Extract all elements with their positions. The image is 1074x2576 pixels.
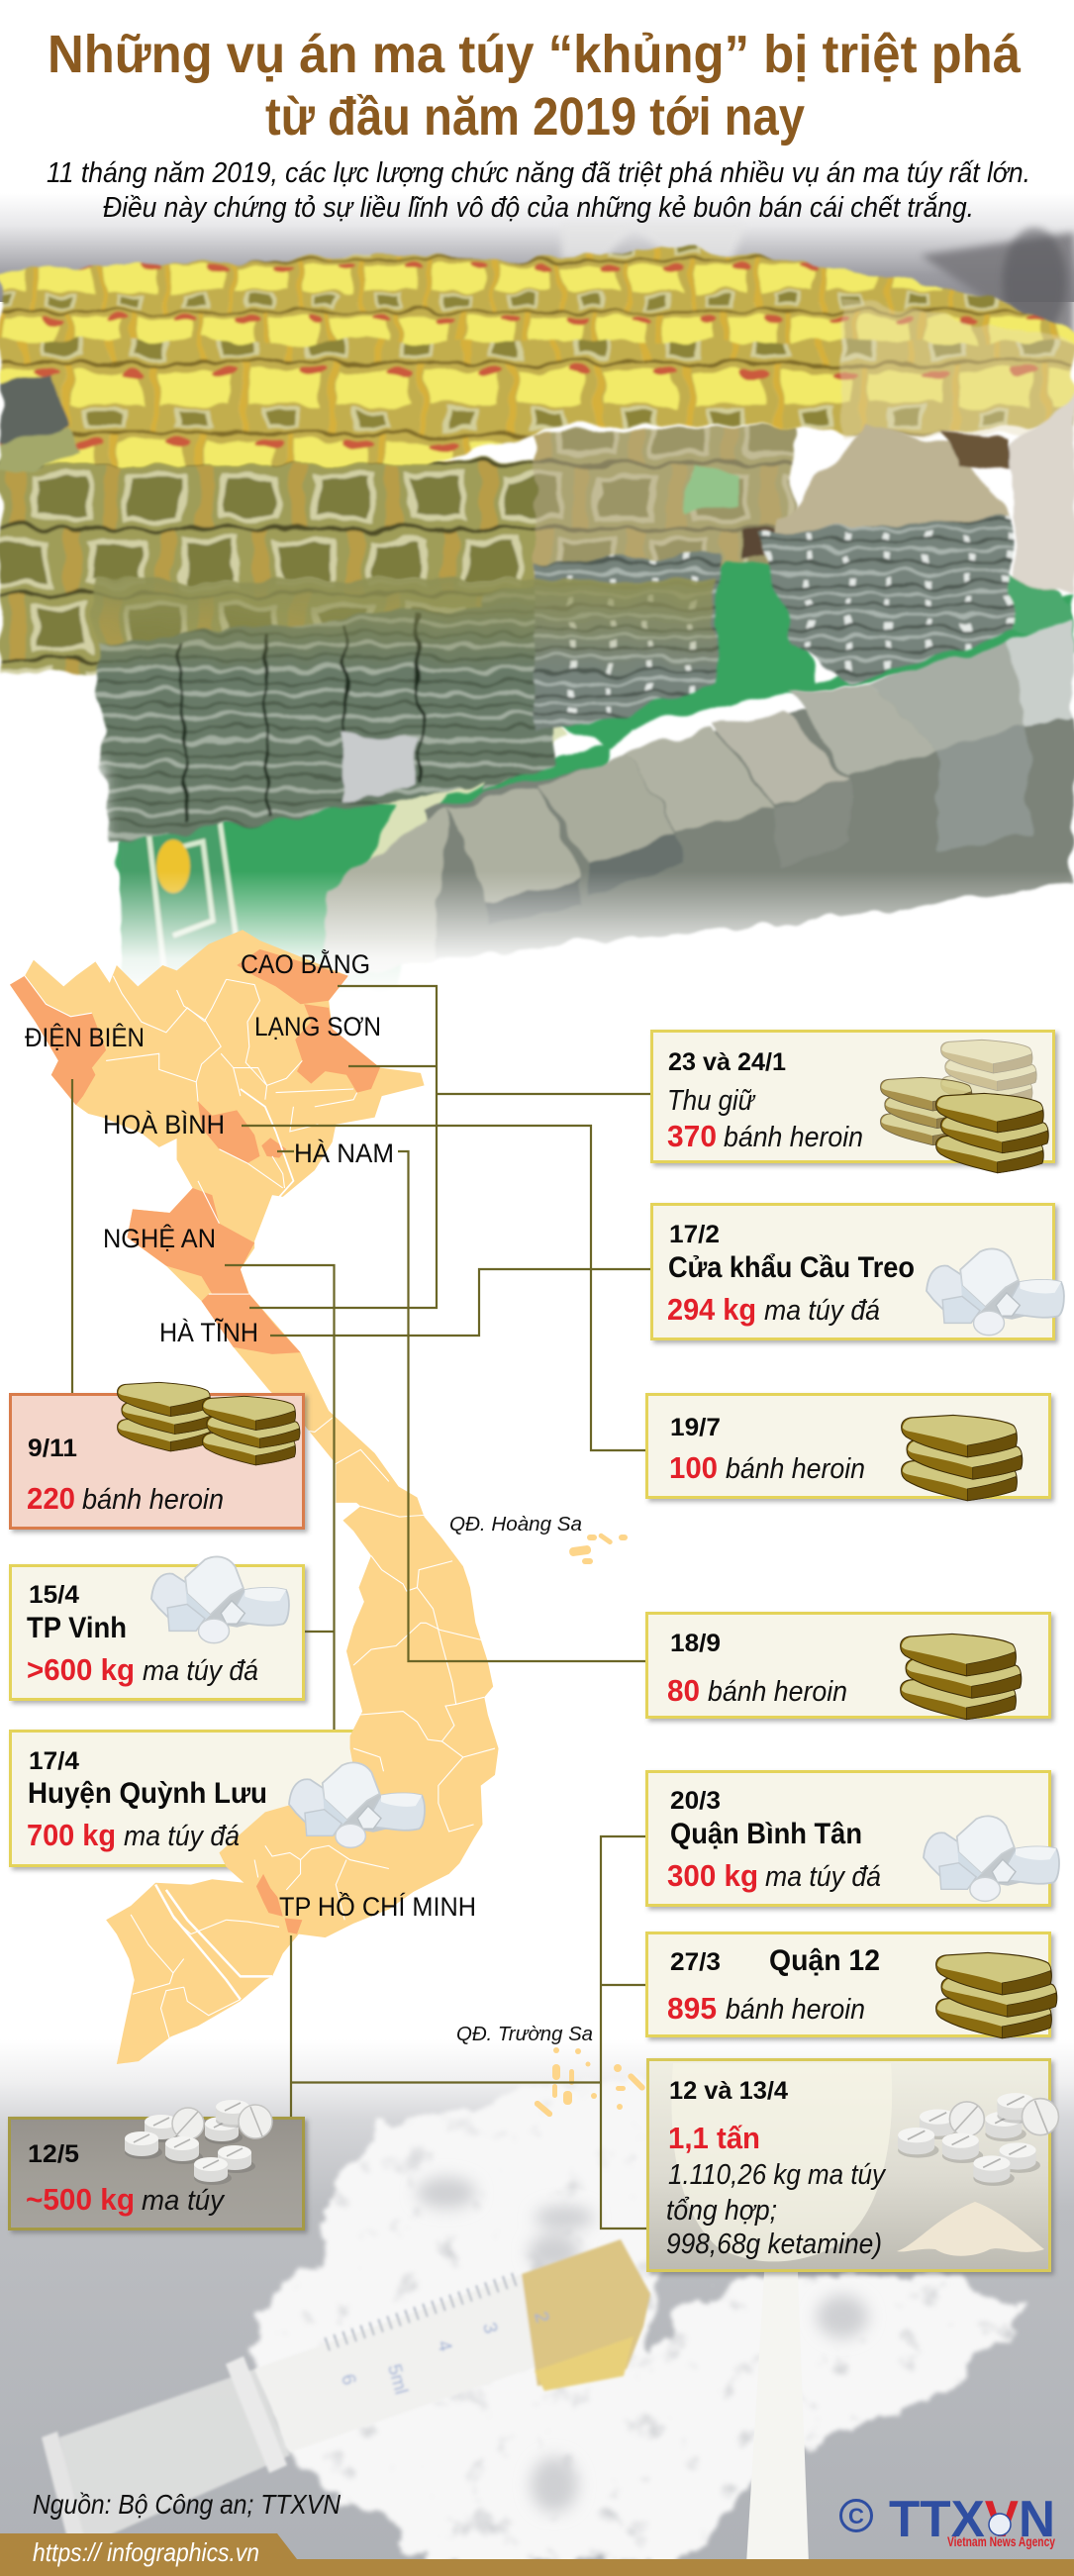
panel: 17/2 Cửa khẩu Cầu Treo: 294 kg [667,1292,756,1327]
icon: pills [898,2093,1059,2186]
silver stack on the right [761,391,1074,683]
province: Hà Tĩnh [202,1294,301,1354]
southern provinces [106,1485,499,2064]
panel: 12 và 13/4: 1.110,26 kg ma túy [668,2159,886,2191]
syringe [42,2239,650,2546]
north and central provinces [10,930,425,1503]
panel: 20/3 Quận Bình Tân [647,1772,1059,1905]
panel: 19/7: 19/7 [670,1414,721,1441]
icon: crystal meth [924,1816,1059,1901]
panel: 20/3 Quận Bình Tân: 20/3 [670,1787,721,1815]
icon: pills [125,2100,272,2185]
panel: 17/4 Huyện Quỳnh Lưu: 17/4 [29,1747,79,1775]
connector: Điện Biên to 9/11 [71,1079,73,1393]
map labels: LẠNG SƠN [254,1012,381,1041]
icon: heroin bricks [902,1415,1023,1501]
carpet border pattern and yellow dot [117,822,240,966]
panel: 23 và 24/1 [651,1032,1053,1173]
white powder pile [254,2079,1025,2564]
cream flower motif on carpet [368,725,568,861]
province: Điện Biên [10,976,106,1105]
powder shadows [417,2177,868,2513]
map labels: HOÀ BÌNH [103,1110,225,1139]
photo: seized heroin packets on green carpet [0,193,1074,1020]
map labels: NGHỆ AN [103,1223,216,1253]
panel: 18/9: 18/9 [670,1630,721,1657]
panel: 18/9 [647,1614,1049,1720]
panel: 9/11 Điện Biên: 9/11 [28,1435,77,1462]
syringe: 4 [433,2338,455,2354]
map labels: ĐIỆN BIÊN [25,1022,145,1052]
panel: 12 và 13/4: 12 và 13/4 [669,2077,788,2105]
syringe: 2 [530,2310,552,2326]
map labels: HÀ TĨNH [159,1317,258,1347]
icon: crystal meth [289,1762,425,1847]
connector: TP Hồ Chí Minh to 12/5 and southern boxes [291,1836,646,2229]
photo: powder and syringe background [0,2039,1074,2576]
map of Vietnam [10,930,662,2118]
logo: TTXVN: TTXVN [889,2491,1055,2548]
panel: 27/3 Quận 12: 27/3 [670,1948,721,1976]
dark wrapped stacks [96,554,721,842]
panel: 17/2 Cửa khẩu Cầu Treo [651,1204,1064,1338]
panel: 12 và 13/4 [647,2059,1059,2271]
intro text [47,157,1030,224]
icon: crystal meth [151,1556,289,1643]
province: Cao Bằng [237,949,348,1004]
panel: 27/3 Quận 12: 895 [667,1991,717,2026]
panel: 27/3 Quận 12 [647,1932,1057,2038]
province: Nghệ An [128,1188,254,1296]
panel: 9/11 Điện Biên: bánh heroin [82,1484,224,1516]
panel: 9/11 Điện Biên: 220 [27,1481,75,1516]
panel: 15/4 TP Vinh: TP Vinh [27,1612,127,1644]
panel: 12/5 TP Hồ Chí Minh: 12/5 [28,2140,79,2168]
spoon bowl [671,2063,892,2261]
icon: heroin bricks [881,1040,1048,1173]
panel: 19/7 [647,1394,1049,1501]
syringe: 6 [337,2372,359,2388]
title [48,25,1022,147]
panel: 12 và 13/4: 1,1 tấn [668,2121,760,2155]
map labels: HÀ NAM [294,1139,394,1168]
map labels: CAO BẰNG [241,948,370,979]
panel: 12/5 TP Hồ Chí Minh: ma túy [142,2185,225,2217]
icon: powder heap [897,2202,1044,2256]
panel: 20/3 Quận Bình Tân: Quận Bình Tân [670,1818,862,1850]
white fades around the photo [0,708,1074,1020]
map labels [25,948,593,2045]
panel: 17/2 Cửa khẩu Cầu Treo: ma túy đá [764,1295,880,1327]
syringe: 3 [478,2321,501,2336]
province: Hoà Bình [198,1101,259,1163]
icon: heroin bricks [936,1952,1057,2038]
footer banner with website: https:// infographics.vn [33,2537,259,2567]
province: Hà Nam [261,1138,286,1158]
panel: 17/2 Cửa khẩu Cầu Treo: 17/2 [669,1221,720,1248]
panel: 18/9: bánh heroin [708,1676,847,1708]
icon: heroin bricks [118,1382,300,1465]
province borders south [131,1506,495,2039]
panel: 19/7: bánh heroin [726,1453,865,1485]
map labels: TP HỒ CHÍ MINH [279,1891,476,1922]
panel: 15/4 TP Vinh: 15/4 [29,1581,79,1609]
connector: Cao Bằng, Lạng Sơn, Hà Tĩnh to 23 và 24/1 [249,986,653,1308]
syringe: 5ml [383,2362,411,2397]
panel: 23 và 24/1: 370 [667,1119,717,1153]
Hoàng Sa islands [569,1533,628,1564]
icon: heroin bricks [901,1634,1022,1720]
panel: 17/4 Huyện Quỳnh Lưu: Huyện Quỳnh Lưu [28,1777,267,1810]
panel: 15/4 TP Vinh [10,1556,303,1699]
connector: Hà Nam to 18/9 [277,1151,645,1661]
icon: crystal meth [927,1248,1064,1336]
title: từ đầu năm 2019 tới nay [265,87,805,147]
panel: 20/3 Quận Bình Tân: 300 kg [667,1858,758,1893]
connector: Nghệ An to 15/4 and 17/4 [225,1265,335,1730]
connector lines [72,986,653,2229]
title: Những vụ án ma túy “khủng” bị triệt phá [48,25,1022,84]
province: TP Hồ Chí Minh [256,1874,302,1934]
map labels: QĐ. Hoàng Sa [449,1514,582,1536]
footer banner with website [0,2533,1074,2576]
panel: 17/2 Cửa khẩu Cầu Treo: Cửa khẩu Cầu Treo [668,1251,915,1284]
province: Lạng Sơn [295,1004,380,1093]
panel: 17/4 Huyện Quỳnh Lưu [27,1747,425,1852]
car behind the packets [0,205,1074,334]
panel: 15/4 TP Vinh: >600 kg [27,1652,135,1687]
panel: 27/3 Quận 12: Quận 12 [769,1944,880,1977]
Trường Sa islands [534,2047,662,2118]
panel: 20/3 Quận Bình Tân: ma túy đá [765,1861,881,1893]
grey gradient background [0,2039,1074,2576]
connector: Hoà Bình to 19/7 [242,1126,645,1450]
green carpet [119,561,1074,990]
panel: 18/9: 80 [667,1673,700,1708]
panel: 12/5 TP Hồ Chí Minh: ~500 kg [26,2182,135,2217]
logo: TTXVN: C [848,2504,864,2528]
panel: 12 và 13/4: 998,68g ketamine) [666,2229,882,2260]
label-side olive packets [0,426,792,673]
panel: 17/4 Huyện Quỳnh Lưu: 700 kg [27,1818,116,1852]
panel: 9/11 Điện Biên [10,1382,303,1529]
gold packets [0,248,1074,473]
intro text: Điều này chứng tỏ sự liều lĩnh vô độ của những kẻ buôn bán cái chết trắng. [103,191,974,224]
panel: 15/4 TP Vinh: ma túy đá [143,1655,258,1687]
case boxes under the map [10,1731,394,1865]
province borders north [25,976,389,1481]
panel: 23 và 24/1: Thu giữ [667,1085,756,1117]
panel: 23 và 24/1: bánh heroin [724,1122,863,1153]
front grey blocks [327,619,1074,980]
panel: 19/7: 100 [669,1450,718,1485]
panel: 27/3 Quận 12: bánh heroin [726,1994,865,2026]
map labels: QĐ. Trường Sa [456,2024,593,2045]
source note: Nguồn: Bộ Công an; TTXVN [33,2489,342,2520]
connector: Hà Tĩnh to 17/2 [270,1269,653,1336]
panel: 12/5 TP Hồ Chí Minh [10,2100,303,2229]
spoon handle [746,2272,809,2564]
panel: 12 và 13/4: tổng hợp; [666,2195,777,2227]
panel: 17/4 Huyện Quỳnh Lưu: ma túy đá [124,1821,240,1852]
box: 17/4 Quỳnh Lưu background [10,1731,394,1865]
panel: 23 và 24/1: 23 và 24/1 [668,1048,786,1076]
